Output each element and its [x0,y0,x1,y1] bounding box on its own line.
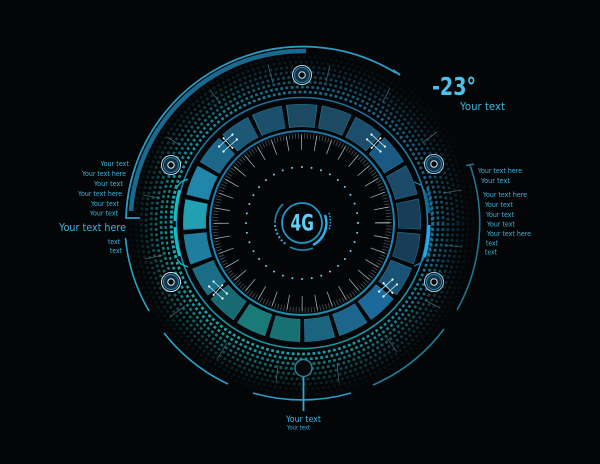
left text block [58,160,129,255]
left text block: Your text [90,200,119,208]
bottom-right arc [373,329,444,385]
icon: knob upper-right [424,154,444,174]
left text block: Your text [89,210,118,218]
icon: crosses on segments [205,131,401,302]
dotted halftone ring [131,52,473,394]
left text block: text [108,238,120,246]
lower-left arc [126,238,149,311]
left text block: Your text [100,160,129,168]
right text block: Your text [484,201,513,209]
icon: knob upper-left [162,156,180,174]
right text block: text [485,248,497,256]
temperature caption: Your text [459,101,505,113]
black disc behind rings [177,98,427,348]
bottom-left arc [164,333,228,384]
segment ring [150,71,454,375]
right text block: Your text here [486,230,531,238]
left text block: Your text [93,180,123,188]
bottom text block: Your text [285,415,322,425]
bottom text block [285,415,322,432]
4G label: 4G [290,212,314,236]
bottom arc [253,393,351,400]
icon: knob bottom with stem [295,360,312,411]
thin radial hairlines [143,65,462,383]
cross top-left [215,131,241,155]
cross top-right [363,131,389,155]
outer thick arc [131,51,306,211]
4G center badge [275,203,330,250]
right arc [457,164,480,310]
bottom text block: Your text [286,424,311,432]
temperature readout: -23° [432,72,476,101]
dotted circle [246,167,358,279]
right accent band [414,182,432,266]
cross bottom-right [375,276,401,300]
right text block: Your text here [477,167,522,175]
icon: knob lower-left [162,272,180,292]
right text block: Your text [486,220,515,228]
inner ring line [210,131,394,315]
right text block: Your text here [482,191,527,199]
left text block: text [110,247,122,255]
icon: knob top [292,66,312,84]
right text block [477,167,531,256]
left accent band [171,179,188,267]
outer ring line [176,98,428,348]
right text block: Your text [485,211,514,219]
cross bottom-left [205,278,231,302]
outer thin arc [126,47,400,218]
left text block: Your text here [81,170,126,178]
segment borders [181,102,423,344]
icon: knob lower-right [424,272,444,292]
left text block: Your text here [77,190,122,198]
left text block: Your text here [58,222,126,234]
right text block: Your text [480,177,510,185]
gauge ticks [215,136,389,310]
right text block: text [486,240,498,248]
